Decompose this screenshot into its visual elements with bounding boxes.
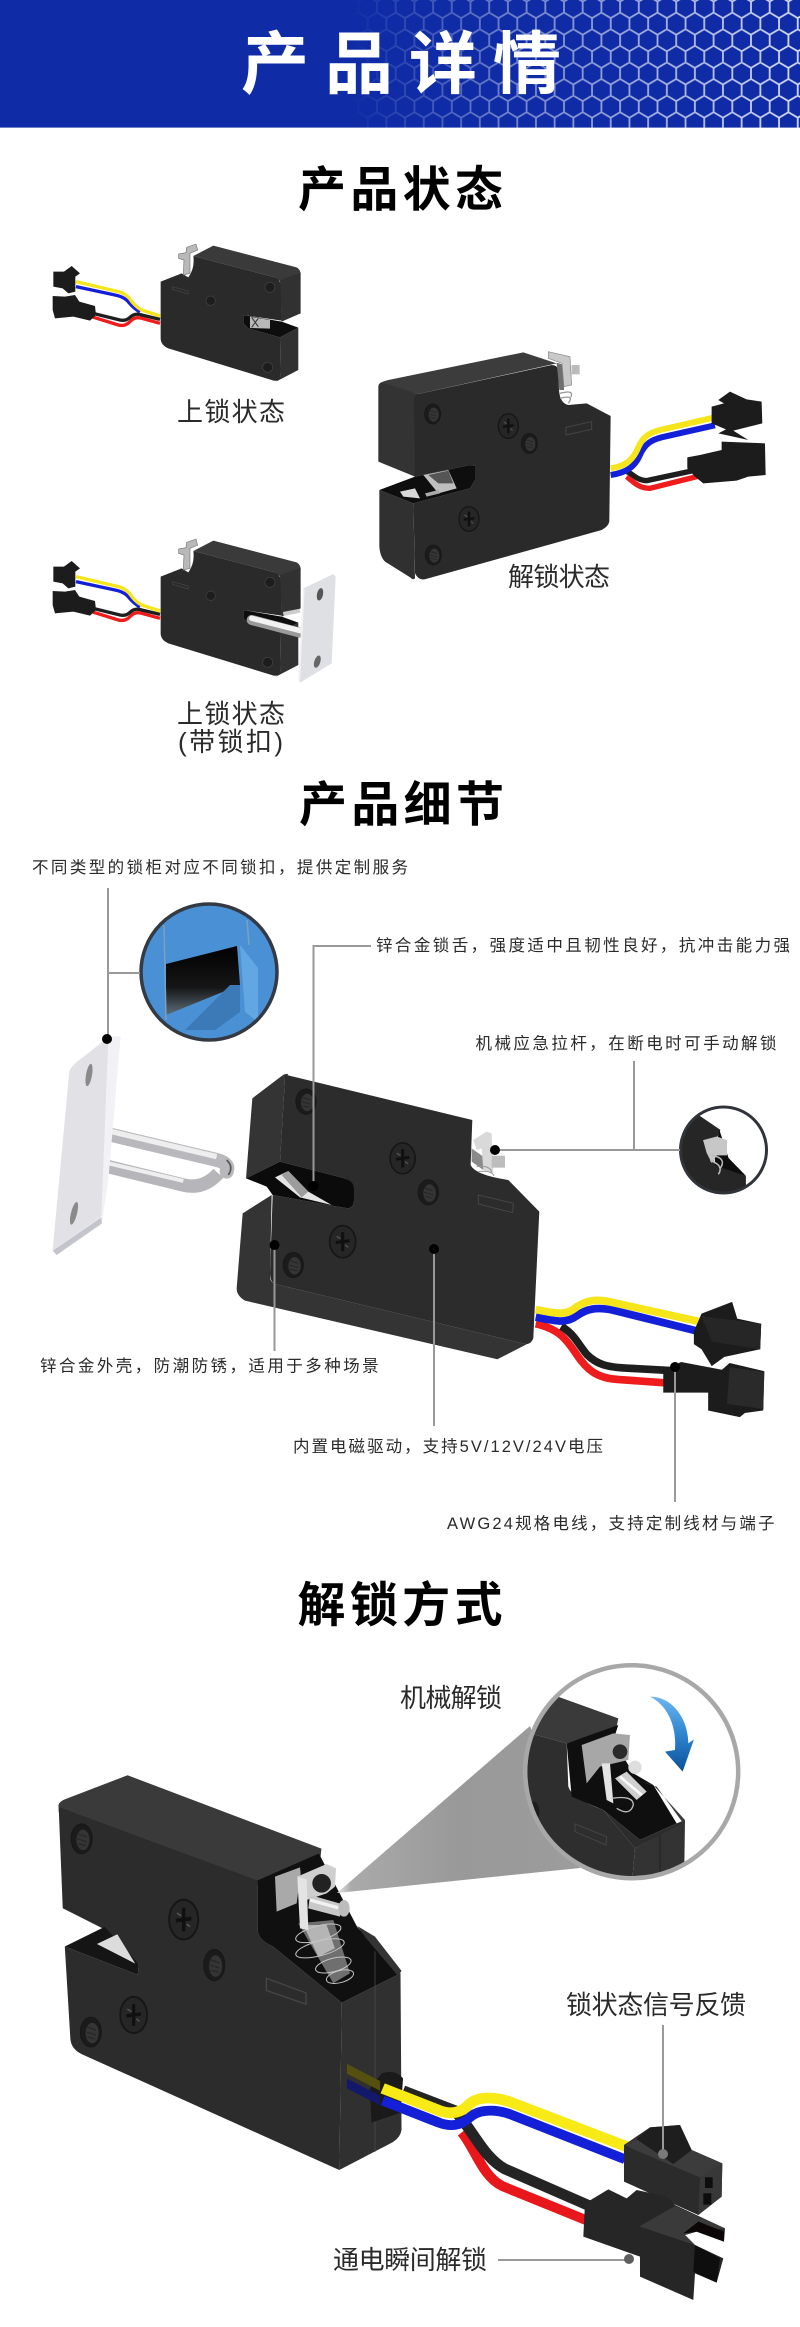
- note: housing: 锌合金外壳，防潮防锈，适用于多种场景: [40, 1356, 379, 1376]
- note: solenoid voltage: 内置电磁驱动，支持5V/12V/24V电压: [293, 1437, 603, 1456]
- detail: strike plate and rod: [53, 1036, 231, 1255]
- wiring harness: [383, 2088, 628, 2220]
- connectors: signal and power plugs: [583, 2125, 725, 2300]
- heading: unlock methods: 解锁方式: [298, 1580, 502, 1632]
- latch and spring: [275, 1864, 355, 1986]
- product: locked with buckle: [53, 539, 301, 677]
- leader lines: product details: [102, 888, 680, 1502]
- heading: product details: 产品细节: [299, 779, 504, 832]
- caption: locked with buckle: (带锁扣): [178, 727, 283, 757]
- lock body: unlock view: [58, 1775, 439, 2170]
- header banner: [0, 0, 800, 128]
- heading: product states: 产品状态: [298, 164, 503, 217]
- label: power unlock: 通电瞬间解锁: [333, 2245, 487, 2275]
- note: wire gauge: AWG24规格电线，支持定制线材与端子: [447, 1514, 774, 1533]
- detail: main lock body: [237, 1074, 539, 1359]
- label: mechanical unlock: 机械解锁: [400, 1683, 502, 1713]
- note: mechanical lever: 机械应急拉杆，在断电时可手动解锁: [476, 1034, 776, 1053]
- buckle plate and rod: [252, 574, 336, 683]
- view cone to magnifier: [337, 1726, 580, 1893]
- product: unlocked state: [378, 352, 766, 580]
- product: locked state: [53, 244, 301, 382]
- caption: locked with buckle: [177, 699, 285, 757]
- detail: latch magnifier: [679, 1107, 766, 1196]
- note: bolt material: 锌合金锁舌，强度适中且韧性良好，抗冲击能力强: [376, 936, 790, 955]
- detail: lock wires: [536, 1300, 764, 1417]
- page title: 产品详情: [241, 27, 561, 103]
- leader lines: unlock methods: [498, 2025, 668, 2264]
- magnifier: mechanical release: [513, 1665, 739, 1887]
- label: status feedback: 锁状态信号反馈: [566, 1990, 746, 2020]
- detail: blue cabinet magnifier: [140, 903, 278, 1041]
- caption: unlocked: 解锁状态: [508, 562, 610, 592]
- caption: locked: 上锁状态: [177, 397, 285, 427]
- caption: locked with buckle: 上锁状态: [177, 699, 285, 729]
- note: custom buckle: 不同类型的锁柜对应不同锁扣，提供定制服务: [32, 858, 408, 877]
